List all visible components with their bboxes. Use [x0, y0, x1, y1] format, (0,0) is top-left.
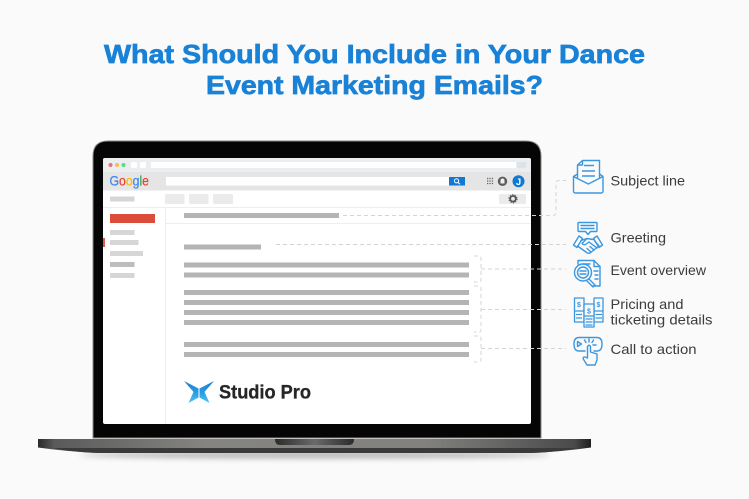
label: Greeting	[610, 230, 666, 246]
compose button	[110, 214, 155, 223]
dividers	[103, 207, 531, 424]
toolbar	[110, 194, 526, 204]
dollar signs: $	[587, 308, 591, 316]
subject connector	[343, 180, 566, 216]
trackpad notch	[275, 439, 354, 445]
icon: button with pointing hand	[574, 338, 602, 365]
pricing bars	[184, 290, 469, 325]
icon: envelope	[574, 160, 603, 193]
title	[104, 39, 645, 100]
sidebar	[103, 214, 155, 278]
search field	[166, 177, 449, 186]
dollar signs	[577, 302, 601, 316]
logo wordmark: Studio Pro	[219, 382, 311, 404]
pricing and ticketing item	[574, 296, 712, 328]
google logo: Google	[110, 172, 149, 188]
label: ticketing details	[610, 312, 712, 328]
laptop	[38, 141, 591, 458]
label: Event overview	[610, 262, 707, 278]
title: Event Marketing Emails?	[206, 70, 543, 100]
overview connector	[474, 256, 566, 282]
icon: price tickets	[574, 298, 603, 327]
call to action item	[574, 338, 696, 365]
studio pro logo	[184, 381, 311, 404]
event overview item	[574, 260, 707, 287]
laptop shadow	[80, 452, 550, 458]
profile icon: J	[516, 177, 521, 188]
profile icon	[512, 175, 524, 188]
email content bars	[184, 213, 469, 357]
laptop lid	[93, 141, 541, 438]
base lower edge	[52, 448, 577, 453]
icon: document with magnifier	[574, 260, 600, 287]
dollar signs: $	[597, 302, 601, 309]
apps grid icon	[487, 178, 494, 184]
label	[610, 296, 712, 328]
pricing connector	[474, 286, 566, 332]
title: What Should You Include in Your Dance	[104, 39, 645, 69]
active item marker	[103, 238, 105, 247]
call to action connector	[474, 336, 566, 362]
search button	[449, 177, 465, 186]
label: Call to action	[610, 341, 696, 357]
label: Subject line	[610, 172, 685, 188]
browser title bar	[103, 158, 531, 172]
email screen	[103, 158, 531, 424]
overview bars	[184, 262, 469, 278]
settings button	[499, 194, 526, 204]
call to action bars	[184, 342, 469, 357]
subject bar	[184, 213, 339, 218]
icon: handshake with speech bubble	[574, 222, 602, 253]
laptop base	[38, 439, 591, 453]
label: Pricing and	[610, 296, 684, 312]
google search bar	[103, 172, 531, 190]
notification icon	[498, 177, 507, 186]
greeting item	[574, 222, 666, 253]
dollar signs: $	[577, 302, 581, 309]
greeting connector	[276, 244, 566, 246]
logo mark	[184, 381, 214, 403]
subject line item	[574, 160, 685, 193]
screen background	[103, 158, 531, 424]
dashed connectors	[276, 180, 566, 362]
greeting bar	[184, 244, 261, 250]
